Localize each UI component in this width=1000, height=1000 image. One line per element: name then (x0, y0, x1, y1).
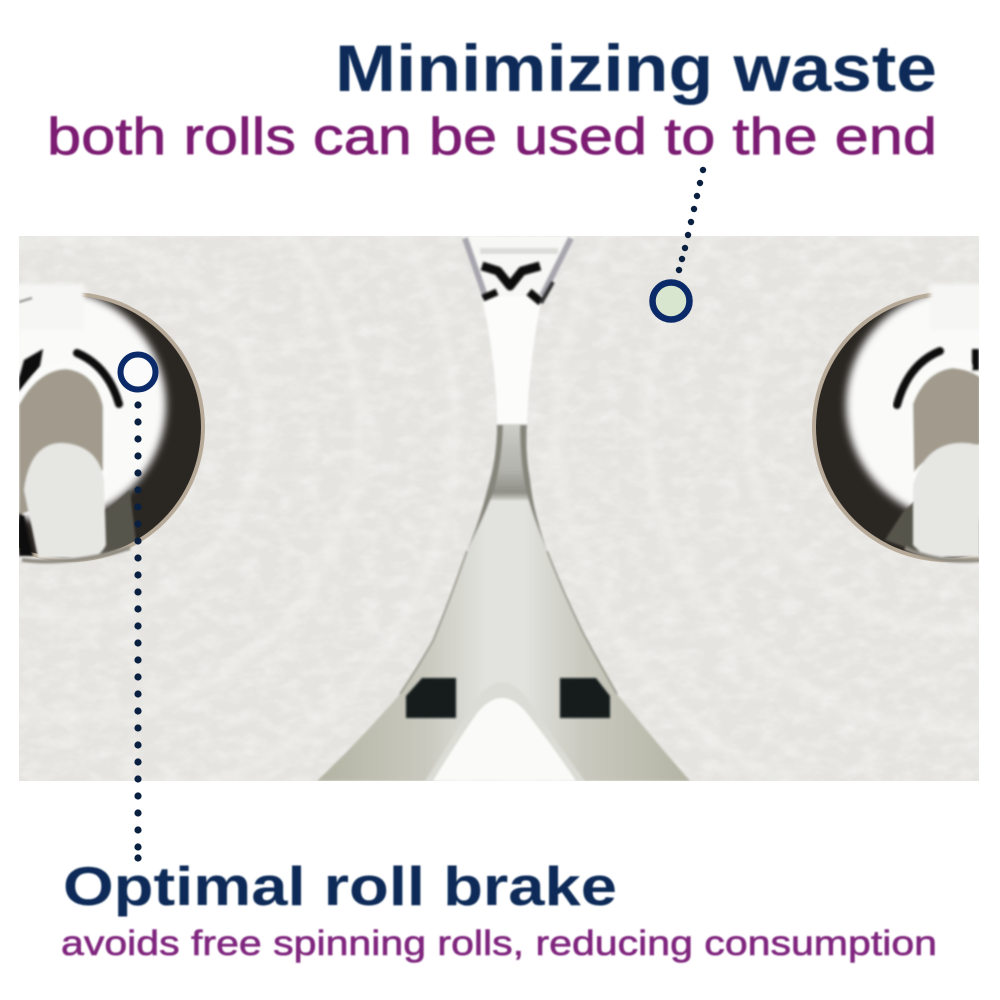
icon: left black square (406, 678, 456, 718)
heading: optimal roll brake: Optimal roll brake (63, 855, 617, 917)
marker: brake point (120, 354, 156, 390)
right hook (912, 362, 979, 470)
heading: minimizing waste: Minimizing waste (335, 31, 937, 105)
white button (24, 443, 106, 558)
central gap between the rolls (310, 236, 700, 781)
dotted leader: minimizing waste (676, 167, 706, 273)
dotted leader: roll brake (134, 401, 142, 862)
neck (490, 424, 529, 500)
right black arcs (897, 351, 940, 405)
icon: right black square (560, 678, 610, 718)
panel: product photo (19, 236, 979, 781)
hook (19, 363, 110, 515)
hole floor shadow (100, 490, 136, 554)
icon: right roll hole (812, 284, 979, 564)
soft lit interior (840, 297, 979, 522)
slot side rails (465, 238, 486, 298)
hole floor shadow (885, 498, 918, 552)
white patch above right hole (927, 284, 979, 300)
icon: left roll hole (0, 284, 205, 565)
subheading: both rolls: both rolls can be used to the end (47, 108, 937, 166)
subheading: avoids free spinning: avoids free spinning rolls, reducing consumption (61, 924, 937, 963)
right white button (913, 443, 980, 557)
white patch above hole (19, 284, 87, 306)
soft lit interior (0, 289, 166, 521)
white wedge (484, 304, 541, 425)
faint roll rings (0, 37, 1000, 817)
white top slot (462, 236, 575, 296)
icon: spring clip (482, 266, 553, 303)
roll edge shadows (400, 551, 467, 694)
bottom white bump (426, 738, 584, 781)
neck side shading (467, 425, 503, 551)
marker: waste point (652, 282, 690, 320)
black arcs (77, 353, 119, 404)
